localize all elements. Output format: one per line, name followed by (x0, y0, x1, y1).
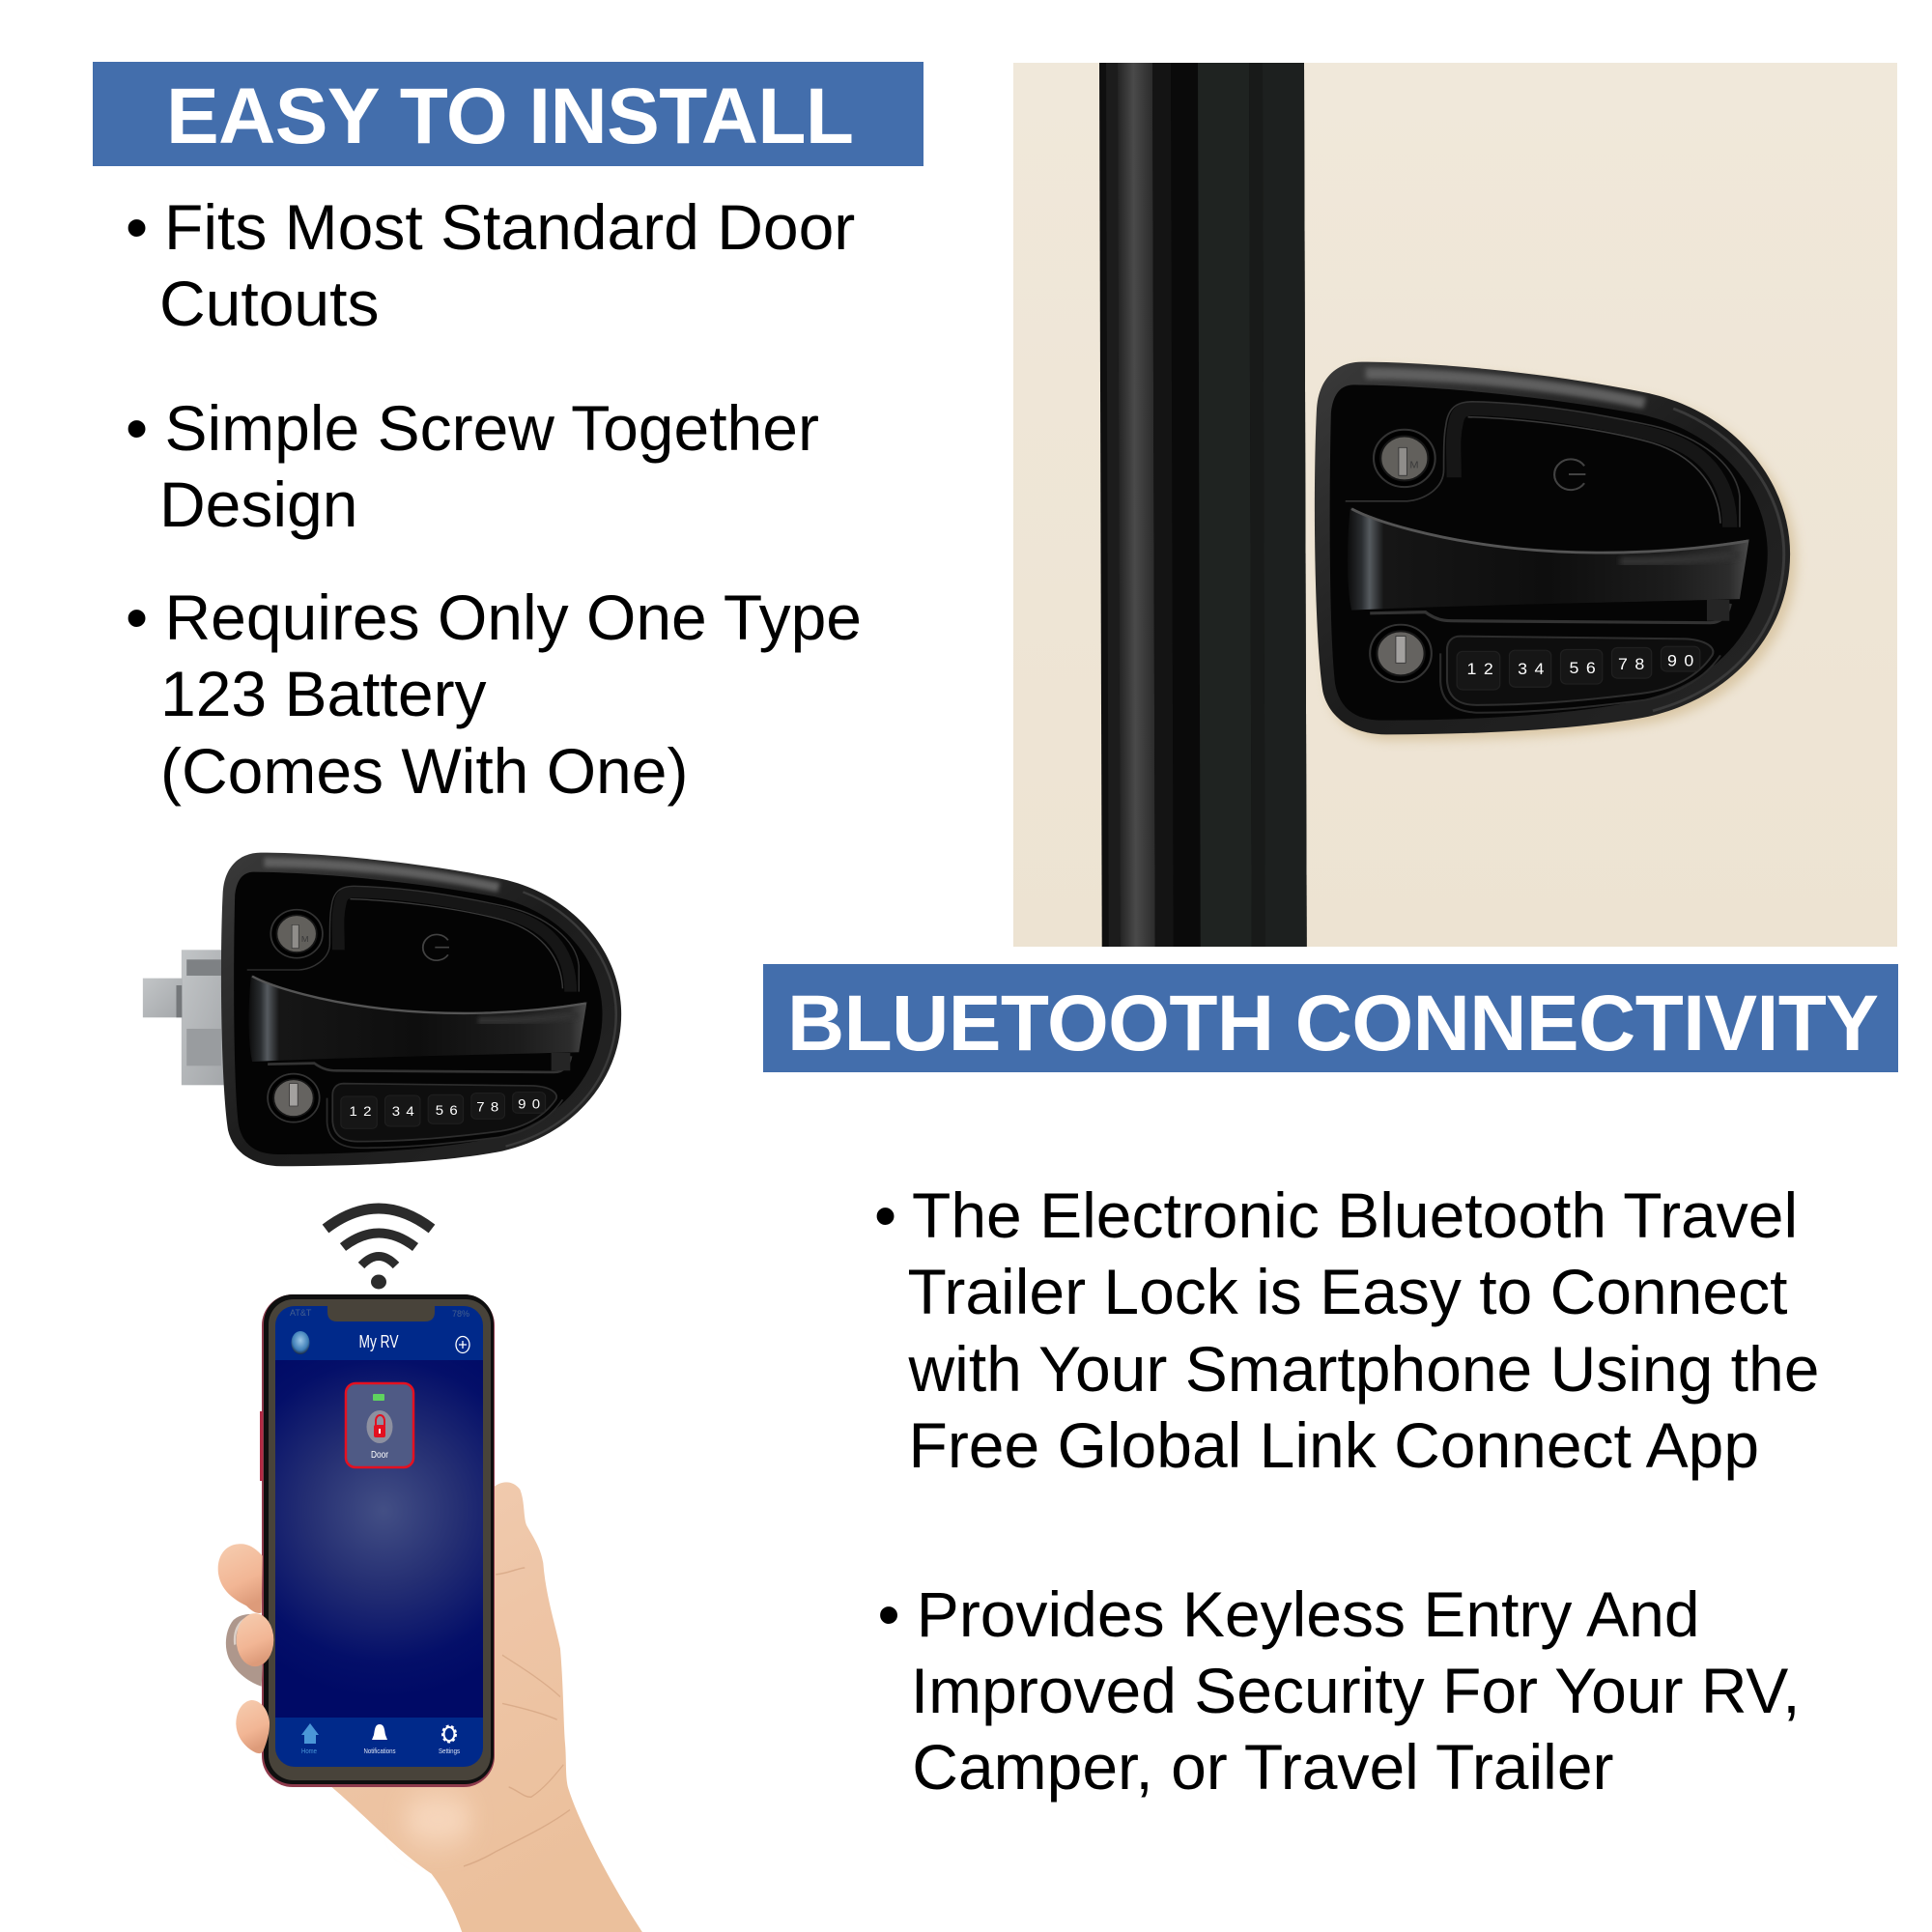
fingers gripping phone (218, 1544, 273, 1753)
bullet: easy to connect with smartphone (874, 1179, 1819, 1481)
bullet: requires one type 123 battery: Requires Only One Type (164, 582, 862, 653)
zinc latch housing (143, 950, 224, 1085)
bullet: requires one type 123 battery: 123 Battery (160, 658, 487, 729)
door wall background (1013, 63, 1897, 947)
screen background (275, 1306, 483, 1767)
bullet: easy to connect with smartphone: Free Global Link Connect App (908, 1409, 1759, 1481)
app title: My RV (359, 1332, 398, 1351)
bullet: simple screw together design: • (126, 392, 148, 464)
battery percent: 78% (452, 1309, 469, 1319)
smartphone (260, 1294, 495, 1787)
door tile (346, 1383, 413, 1467)
bullet: fits most standard door cutouts: Fits Most Standard Door (164, 191, 855, 263)
door lock: 9 0 (1667, 651, 1695, 669)
bullet: fits most standard door cutouts: • (126, 191, 148, 263)
lock shadow on door (1321, 368, 1797, 741)
bullet: fits most standard door cutouts (126, 191, 855, 339)
door lock (1315, 362, 1790, 734)
bullet: requires one type 123 battery (126, 582, 862, 807)
bullet: simple screw together design: Design (159, 469, 357, 540)
black door frame (1099, 63, 1307, 947)
icon: app globe (292, 1331, 309, 1354)
product photo: lock with latch (143, 853, 621, 1166)
icon: wireless signal (326, 1208, 432, 1289)
tab: home: Home (301, 1747, 317, 1755)
finger three (236, 1700, 270, 1753)
keypad: 5 6 (436, 1103, 459, 1119)
icon: add button (456, 1337, 469, 1352)
finger two knuckle and nail (226, 1614, 263, 1687)
keypad: 7 8 (476, 1100, 499, 1115)
door tile: Door (371, 1450, 389, 1461)
bullet: fits most standard door cutouts: Cutouts (159, 268, 379, 339)
bullet: keyless entry and improved security (877, 1578, 1801, 1803)
bullet: keyless entry and improved security: Camper, or Travel Trailer (912, 1731, 1614, 1803)
finger two pad (237, 1613, 273, 1666)
heading bar: easy to install (93, 62, 923, 166)
heading bar: easy to install: EASY TO INSTALL (166, 72, 854, 160)
side buttons (260, 1411, 263, 1481)
door lock: M (1409, 460, 1419, 470)
key cylinder: top (270, 910, 323, 958)
key cylinder: top: M (301, 934, 309, 944)
bullet: easy to connect with smartphone: with Your Smartphone Using the (908, 1333, 1819, 1405)
tab: settings: Settings (439, 1747, 460, 1755)
photo: lock installed on door (1013, 63, 1897, 947)
bullet: keyless entry and improved security: • (877, 1578, 900, 1650)
bullet: simple screw together design: Simple Screw Together (164, 392, 819, 464)
key cylinder: bottom (268, 1074, 320, 1122)
bullet: simple screw together design (126, 392, 819, 540)
bullet: requires one type 123 battery: • (126, 582, 148, 653)
finger one (218, 1544, 263, 1613)
keypad: 3 4 (392, 1104, 415, 1120)
status text: AT&T (290, 1308, 312, 1318)
bullet: easy to connect with smartphone: Trailer Lock is Easy to Connect (908, 1256, 1787, 1327)
bullet: keyless entry and improved security: Provides Keyless Entry And (917, 1578, 1700, 1650)
door lock: 7 8 (1618, 655, 1646, 673)
phone body (262, 1294, 495, 1787)
bullet: keyless entry and improved security: Improved Security For Your RV, (911, 1655, 1801, 1726)
tab: notifications: Notifications (363, 1747, 396, 1755)
door lock: 3 4 (1518, 660, 1546, 678)
bullet: requires one type 123 battery: (Comes With One) (160, 735, 688, 807)
tab: notifications (363, 1724, 396, 1755)
bullet: easy to connect with smartphone: The Electronic Bluetooth Travel (912, 1179, 1798, 1251)
tab: home (301, 1723, 319, 1755)
keypad: 9 0 (518, 1097, 541, 1112)
keypad (327, 1084, 562, 1148)
handle (249, 975, 586, 1062)
keypad: 1 2 (350, 1104, 373, 1120)
screen main area (275, 1360, 483, 1718)
lock body (221, 853, 621, 1166)
hand holding phone: palm and wrist (331, 1482, 642, 1932)
door lock: 1 2 (1466, 660, 1494, 678)
fingernail highlight (235, 1619, 246, 1645)
panel: bluetooth connectivity (763, 964, 1898, 1803)
panel: easy to install (93, 62, 923, 807)
heading bar: bluetooth connectivity: BLUETOOTH CONNECTIVITY (787, 980, 1879, 1067)
tab: settings (439, 1725, 460, 1755)
icon: G logo (423, 934, 449, 960)
door lock: 5 6 (1570, 659, 1597, 677)
bullet: easy to connect with smartphone: • (874, 1179, 896, 1251)
notch (327, 1304, 435, 1321)
